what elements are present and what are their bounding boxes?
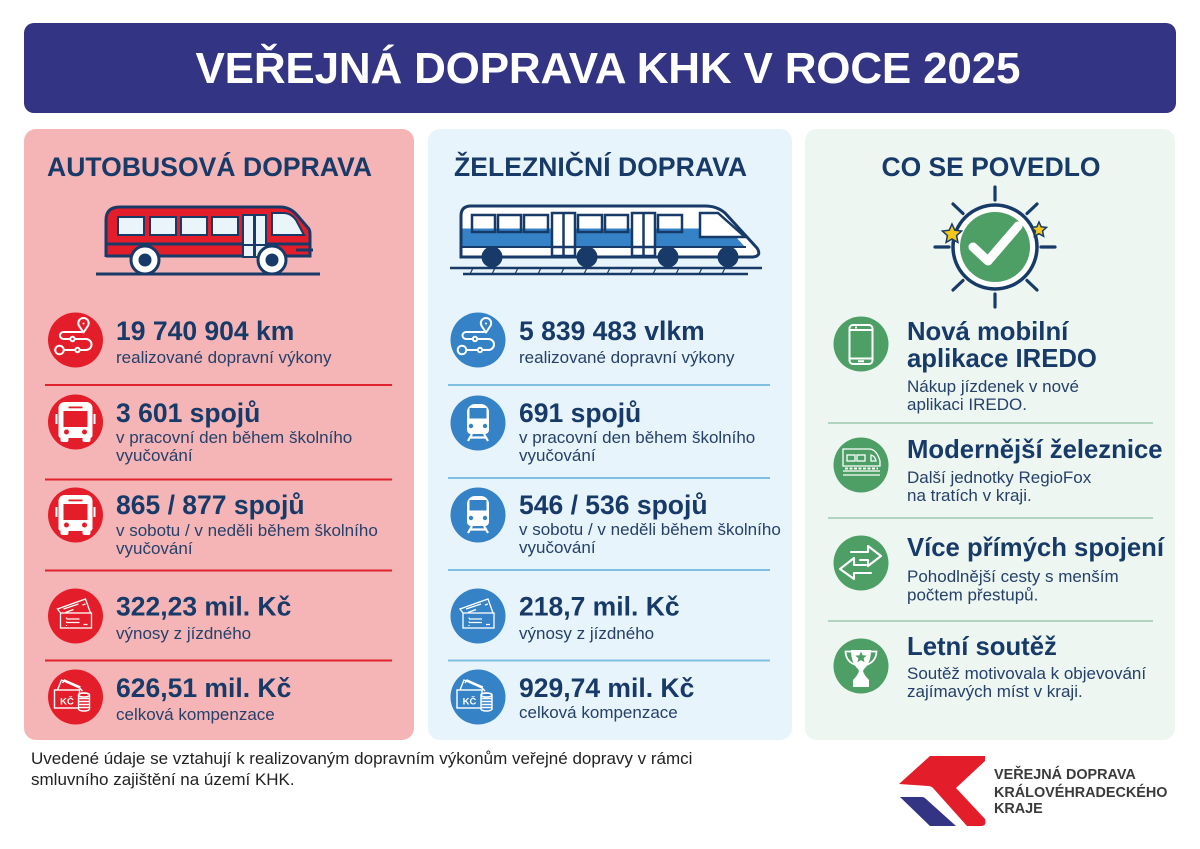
stat: výnosy: výnosy z jízdného: [116, 624, 251, 643]
item: letní soutěž: Letní soutěž: [907, 633, 1057, 661]
heading: autobusová doprava: AUTOBUSOVÁ DOPRAVA: [47, 152, 372, 182]
item: přímá spojení: [834, 534, 1165, 604]
stat: pracovní den: vyučování: [116, 446, 193, 465]
item: letní soutěž: Soutěž motivovala k objevování: [907, 664, 1146, 683]
panel: autobusová doprava: [24, 129, 414, 740]
stat: víkend: [48, 488, 378, 558]
stat: výkony: 5 839 483 vlkm: [519, 316, 705, 346]
stat: pracovní den: [48, 394, 352, 465]
item: mobilní aplikace: Nákup jízdenek v nové: [907, 377, 1079, 396]
stat: kompenzace: 626,51 mil. Kč: [116, 673, 291, 703]
stat: výnosy: [450, 588, 680, 644]
item: mobilní aplikace: aplikace IREDO: [907, 345, 1097, 373]
stat: víkend: [450, 488, 781, 557]
title banner: VEŘEJNÁ DOPRAVA KHK V ROCE 2025: [196, 43, 1020, 93]
footnote: Uvedené údaje se vztahují k realizovaným dopravním výkonům veřejné dopravy v rámci: [31, 749, 692, 768]
stat: víkend: 546 / 536 spojů: [519, 490, 708, 520]
stat: výkony: realizované dopravní výkony: [116, 348, 332, 367]
logo: [899, 756, 1168, 826]
stat: výnosy: 218,7 mil. Kč: [519, 592, 680, 622]
stat: pracovní den: 3 601 spojů: [116, 398, 260, 428]
stat: výnosy: [48, 588, 291, 644]
stat: pracovní den: 691 spojů: [519, 398, 641, 428]
stat: kompenzace: [48, 670, 291, 724]
icon: train: [450, 206, 762, 274]
stat: výnosy: výnosy z jízdného: [519, 624, 654, 643]
stat: výkony: [48, 312, 332, 368]
item: modernější železnice: Modernější železnice: [907, 436, 1163, 464]
logo: VEŘEJNÁ DOPRAVA: [994, 765, 1136, 783]
stat: víkend: 865 / 877 spojů: [116, 490, 305, 520]
item: mobilní aplikace: [834, 316, 1097, 414]
item: modernější železnice: na tratích v kraji.: [907, 486, 1032, 505]
stat: víkend: vyučování: [116, 539, 193, 558]
item: přímá spojení: Pohodlnější cesty s menším: [907, 567, 1119, 586]
logo: KRAJE: [994, 801, 1043, 817]
item: přímá spojení: Více přímých spojení: [907, 534, 1165, 562]
item: modernější železnice: Další jednotky RegioFox: [907, 468, 1092, 487]
footnote: [31, 749, 692, 789]
stat: kompenzace: celková kompenzace: [116, 705, 275, 724]
stat: víkend: vyučování: [519, 538, 596, 557]
panel: železniční doprava: [428, 129, 792, 740]
stat: pracovní den: [450, 396, 755, 465]
panel: co se povedlo: [805, 129, 1175, 740]
stat: víkend: v sobotu / v neděli během školního: [116, 521, 378, 540]
item: přímá spojení: počtem přestupů.: [907, 586, 1038, 604]
heading: železniční doprava: ŽELEZNIČNÍ DOPRAVA: [454, 152, 747, 182]
stat: pracovní den: v pracovní den během školního: [519, 428, 755, 447]
title banner: [24, 23, 1176, 113]
stat: kompenzace: celková kompenzace: [519, 703, 678, 722]
stat: pracovní den: v pracovní den během školního: [116, 428, 352, 447]
stat: kompenzace: KČ: [60, 696, 74, 708]
item: mobilní aplikace: aplikaci IREDO.: [907, 395, 1027, 414]
item: modernější železnice: [834, 436, 1163, 505]
icon: bus: [96, 207, 320, 274]
stat: výnosy: 322,23 mil. Kč: [116, 592, 291, 622]
stat: pracovní den: vyučování: [519, 446, 596, 465]
item: letní soutěž: zajímavých míst v kraji.: [907, 682, 1083, 701]
icon: check badge: [935, 187, 1055, 307]
stat: výkony: [450, 312, 735, 368]
item: mobilní aplikace: Nová mobilní: [907, 318, 1069, 346]
footnote: smluvního zajištění na území KHK.: [31, 770, 295, 789]
stat: víkend: v sobotu / v neděli během školního: [519, 520, 781, 539]
stat: kompenzace: 929,74 mil. Kč: [519, 673, 694, 703]
stat: výkony: 19 740 904 km: [116, 316, 294, 346]
stat: kompenzace: [450, 670, 694, 724]
stat: výkony: realizované dopravní výkony: [519, 348, 735, 367]
stat: kompenzace: KČ: [463, 696, 476, 708]
logo: KRÁLOVÉHRADECKÉHO: [994, 784, 1168, 801]
item: letní soutěž: [834, 633, 1146, 701]
heading: co se povedlo: CO SE POVEDLO: [882, 152, 1100, 182]
